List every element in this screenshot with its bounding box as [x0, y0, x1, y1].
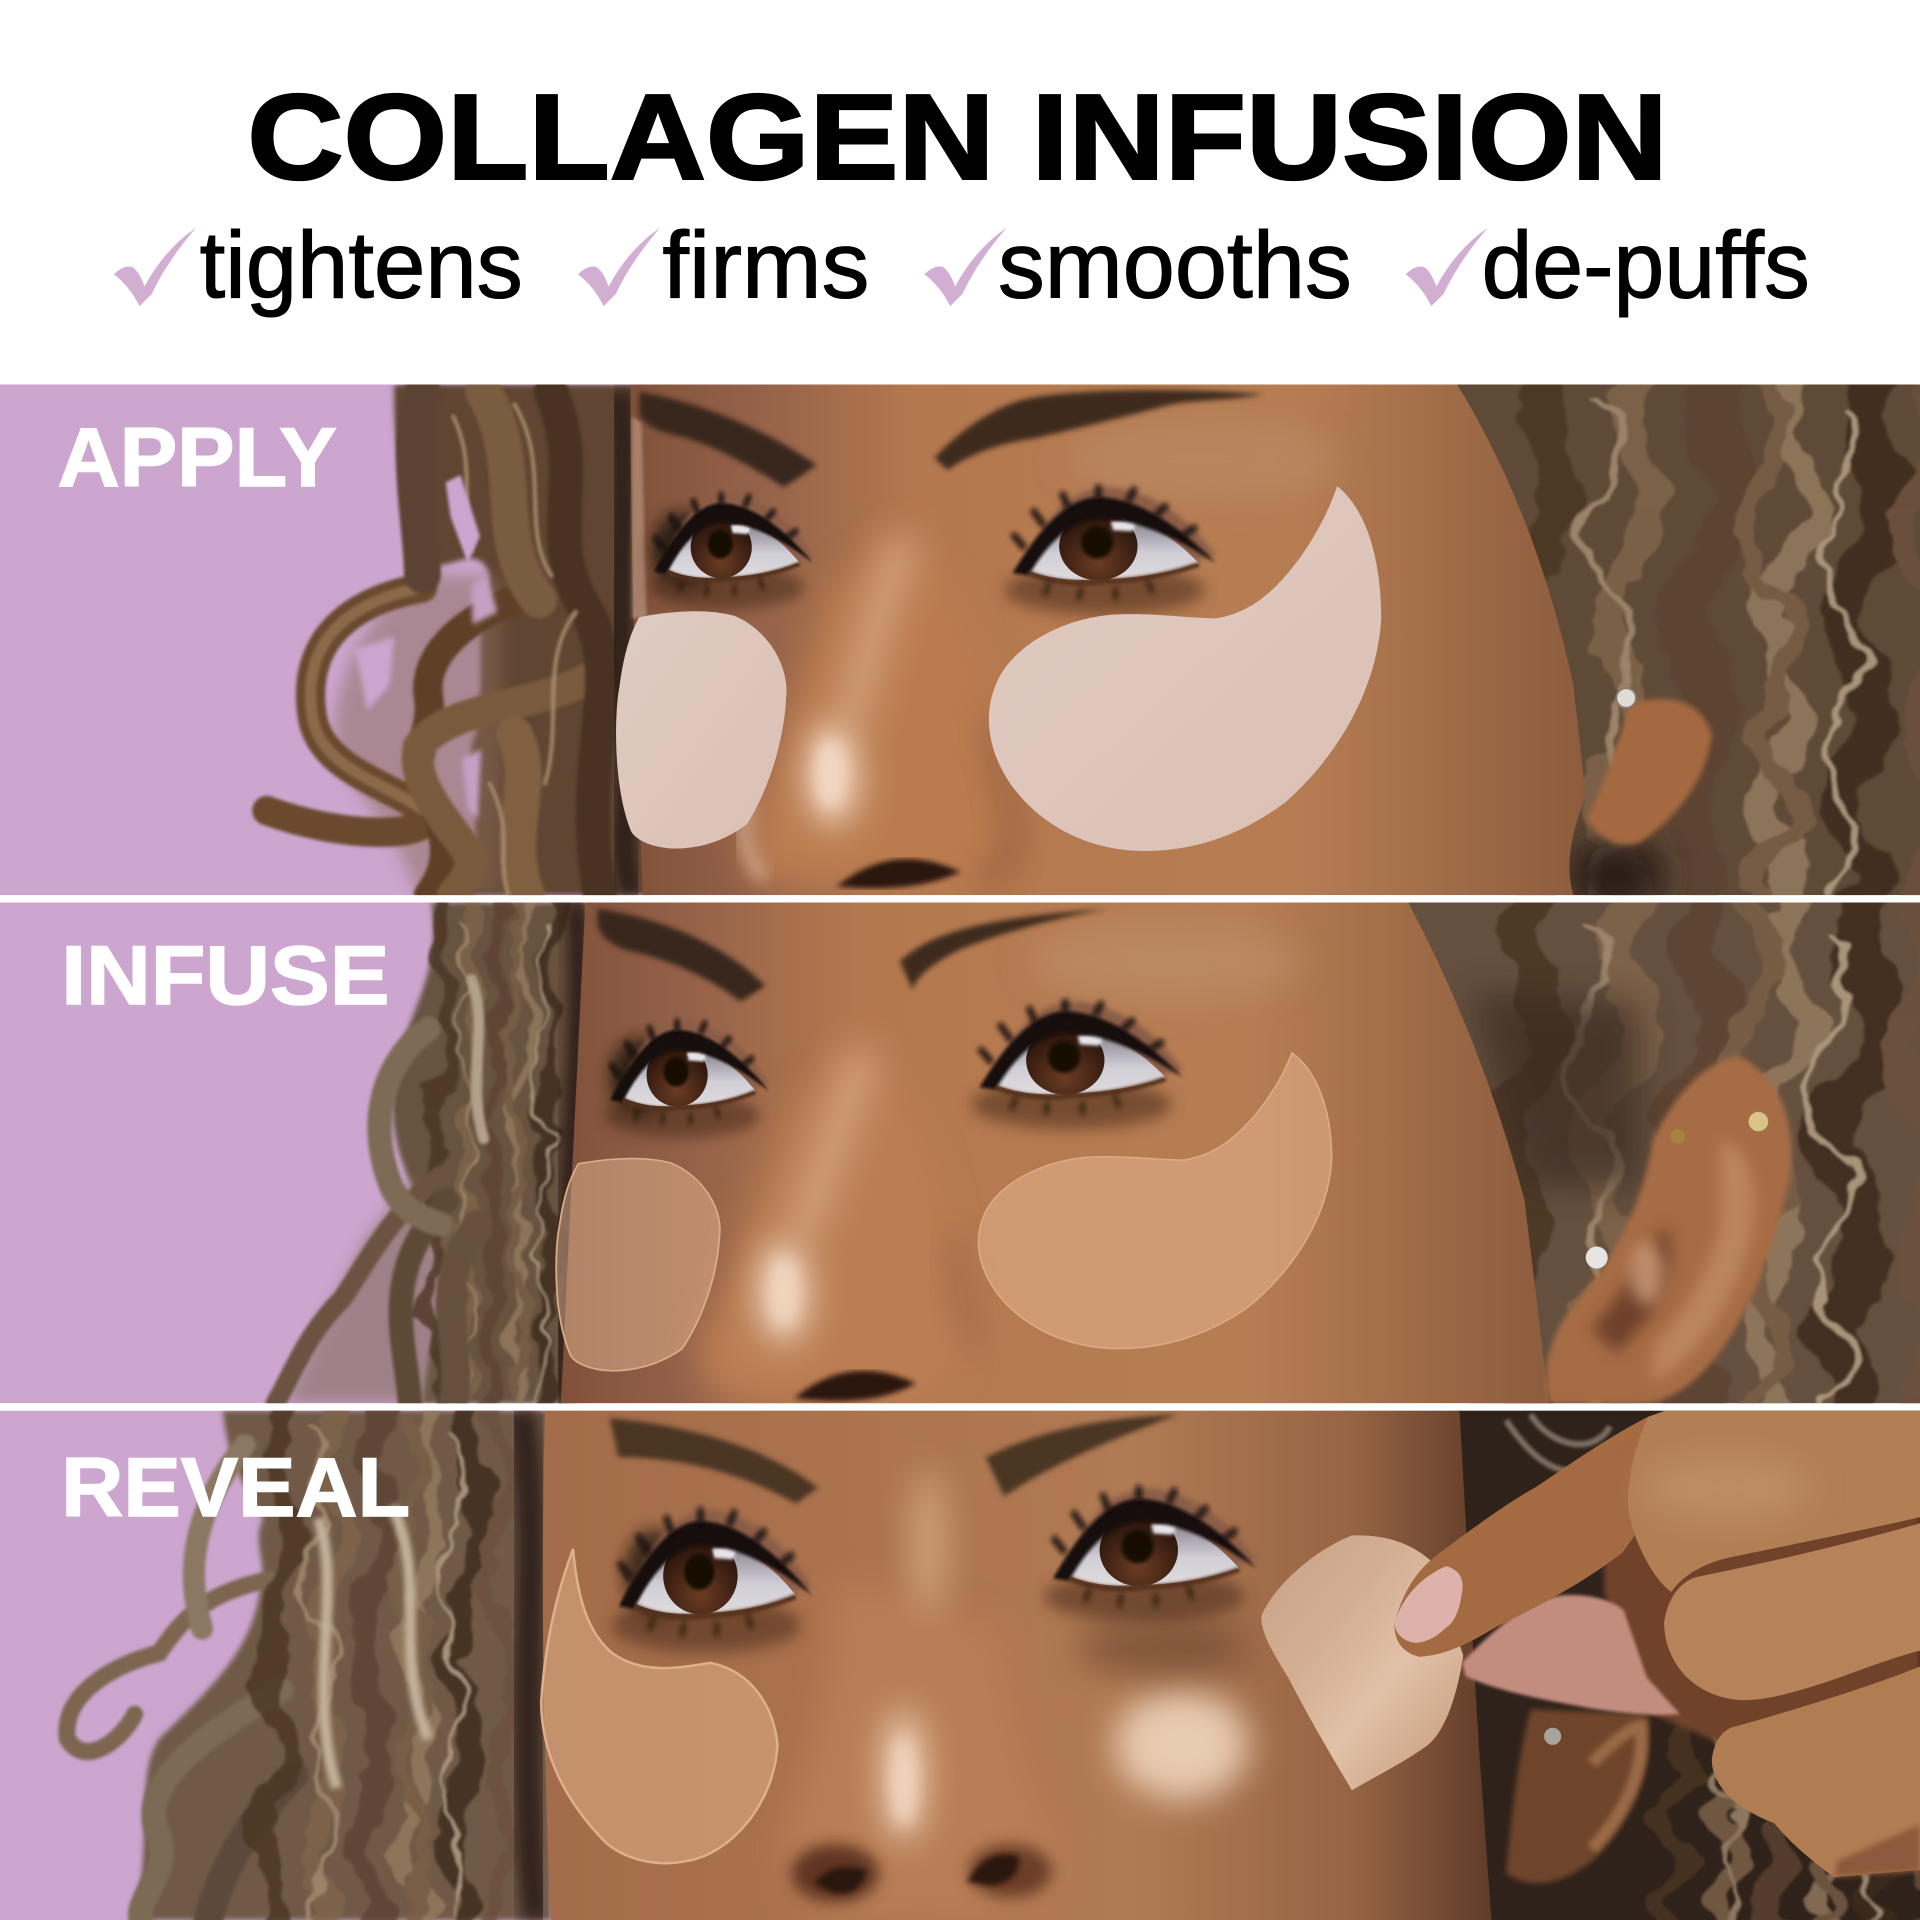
right eye: [1044, 1486, 1256, 1622]
right brow: [934, 390, 1264, 470]
panel: apply: [0, 367, 1920, 915]
right hair: [1384, 894, 1920, 1420]
left eye patch: [541, 1549, 778, 1863]
title: COLLAGEN INFUSION: [247, 69, 1668, 205]
left hair: [67, 1402, 551, 1920]
face: [631, 384, 1586, 895]
right eye patch: [979, 1053, 1332, 1349]
nose: [745, 527, 1014, 888]
ear: [1506, 1709, 1649, 1883]
heading: REVEAL: REVEAL: [61, 1441, 410, 1534]
ear: [1587, 699, 1712, 844]
under-eye shadow: [1078, 1618, 1249, 1676]
face: [543, 1411, 1491, 1920]
cheek highlight: [1114, 1690, 1249, 1800]
benefit: smooths: smooths: [998, 213, 1352, 318]
left eye: [604, 1019, 769, 1138]
hand: lower finger shadow: [1834, 1824, 1920, 1877]
lilac backdrop: [0, 1411, 1920, 1920]
earrings: [1586, 1112, 1768, 1269]
left brow: [610, 1418, 818, 1504]
left eye: [648, 492, 813, 609]
hand: lower finger: [1712, 1667, 1920, 1877]
heading: INFUSE: INFUSE: [61, 929, 389, 1022]
right hair: [1457, 1411, 1920, 1920]
hand: nail: [1395, 1566, 1463, 1643]
lilac backdrop: [0, 384, 643, 895]
lilac backdrop: [0, 902, 1920, 1403]
benefit: de-puffs: de-puffs: [1482, 213, 1810, 318]
right eye: [1004, 485, 1216, 615]
hand: [1395, 1411, 1920, 1877]
left hair: [276, 894, 600, 1410]
hand: thumb: [1462, 1595, 1680, 1715]
forehead glow: [1076, 422, 1320, 496]
right eye patch: [989, 486, 1381, 851]
left eye patch: [556, 1159, 720, 1371]
hand: highlight: [1641, 1453, 1812, 1522]
left brow: [639, 392, 817, 487]
patch tip by the hairline: [632, 416, 647, 618]
benefits row: [114, 213, 1810, 318]
right hair: [1457, 384, 1920, 896]
panel: infuse: [0, 894, 1920, 1420]
benefit: tightens: tightens: [200, 213, 523, 318]
left eye patch: [616, 611, 787, 849]
left eye: [611, 1507, 812, 1653]
earring: [1616, 688, 1636, 708]
hand: middle finger: [1664, 1523, 1920, 1700]
hand: index finger: [1395, 1417, 1656, 1657]
nose: [699, 1041, 973, 1403]
benefit: firms: firms: [662, 213, 869, 318]
nose: [786, 1469, 1060, 1918]
face: [561, 902, 1549, 1403]
right brow: [986, 1414, 1178, 1496]
hand: palm column: [1604, 1469, 1920, 1837]
ear: [1546, 1056, 1792, 1403]
forehead glow: [1029, 920, 1298, 1003]
heading: APPLY: APPLY: [58, 411, 337, 504]
peeled patch: [1261, 1535, 1463, 1790]
left brow: [598, 909, 765, 1002]
right eye: [971, 999, 1183, 1129]
earring: [1544, 1728, 1561, 1745]
right brow: [900, 909, 1108, 989]
panel: reveal: [0, 1402, 1920, 1920]
left hair: [267, 384, 649, 895]
hand: upper finger: [1628, 1411, 1920, 1592]
